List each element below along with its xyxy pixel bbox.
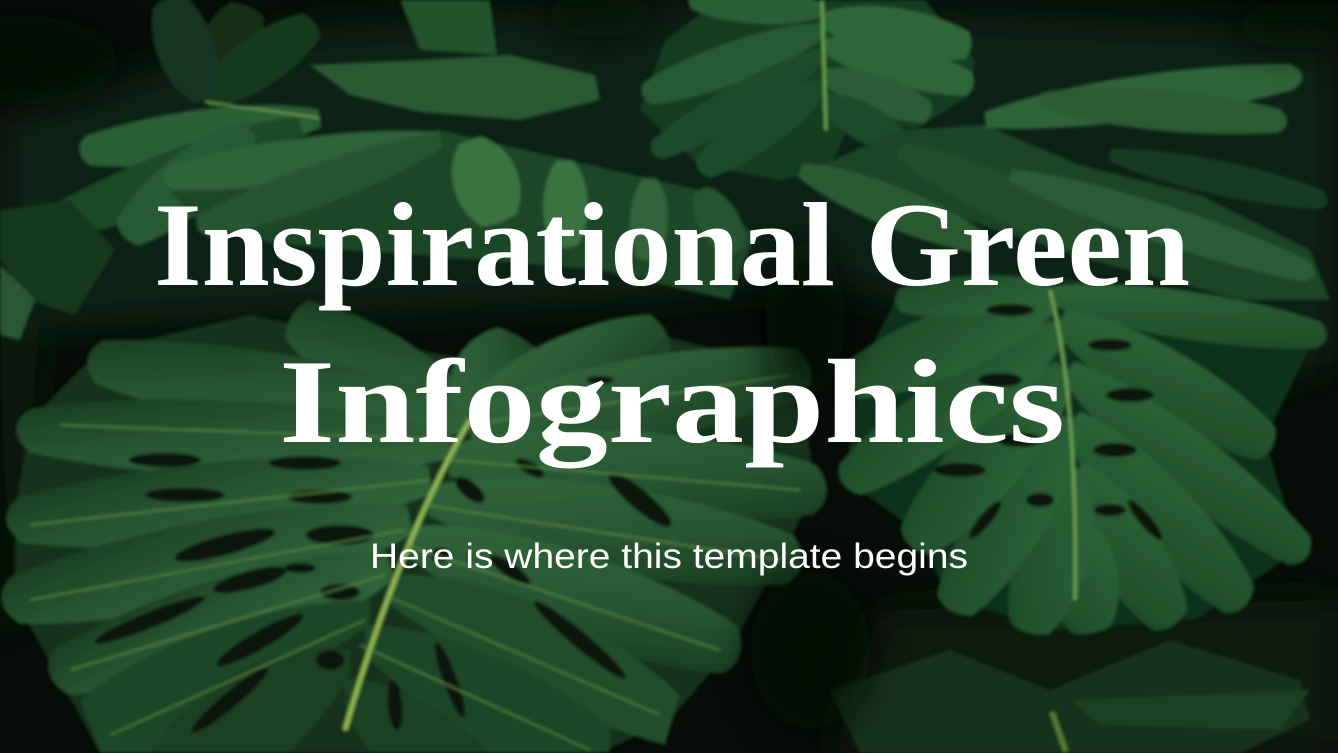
right leaf: dark holes (934, 304, 1166, 544)
title line 2: Infographics (279, 335, 1065, 469)
main leaf: veins (30, 375, 800, 750)
leaf: upper right monstera (792, 53, 1331, 300)
leaf: large lower left monstera (0, 285, 831, 753)
right leaf: midrib (1050, 290, 1075, 600)
main leaf: midrib (345, 420, 470, 730)
leaf: right monstera (824, 270, 1331, 644)
leaf: upper middle fronds (161, 118, 755, 300)
leaf: bottom right shadowed monstera (830, 640, 1310, 753)
leaf: top left monstera (0, 0, 600, 340)
main leaf: dark holes (91, 376, 677, 738)
leaf: top center monstera (635, 0, 979, 188)
subtitle: Here is where this template begins (370, 537, 968, 576)
title line 1: Inspirational Green (154, 178, 1190, 311)
